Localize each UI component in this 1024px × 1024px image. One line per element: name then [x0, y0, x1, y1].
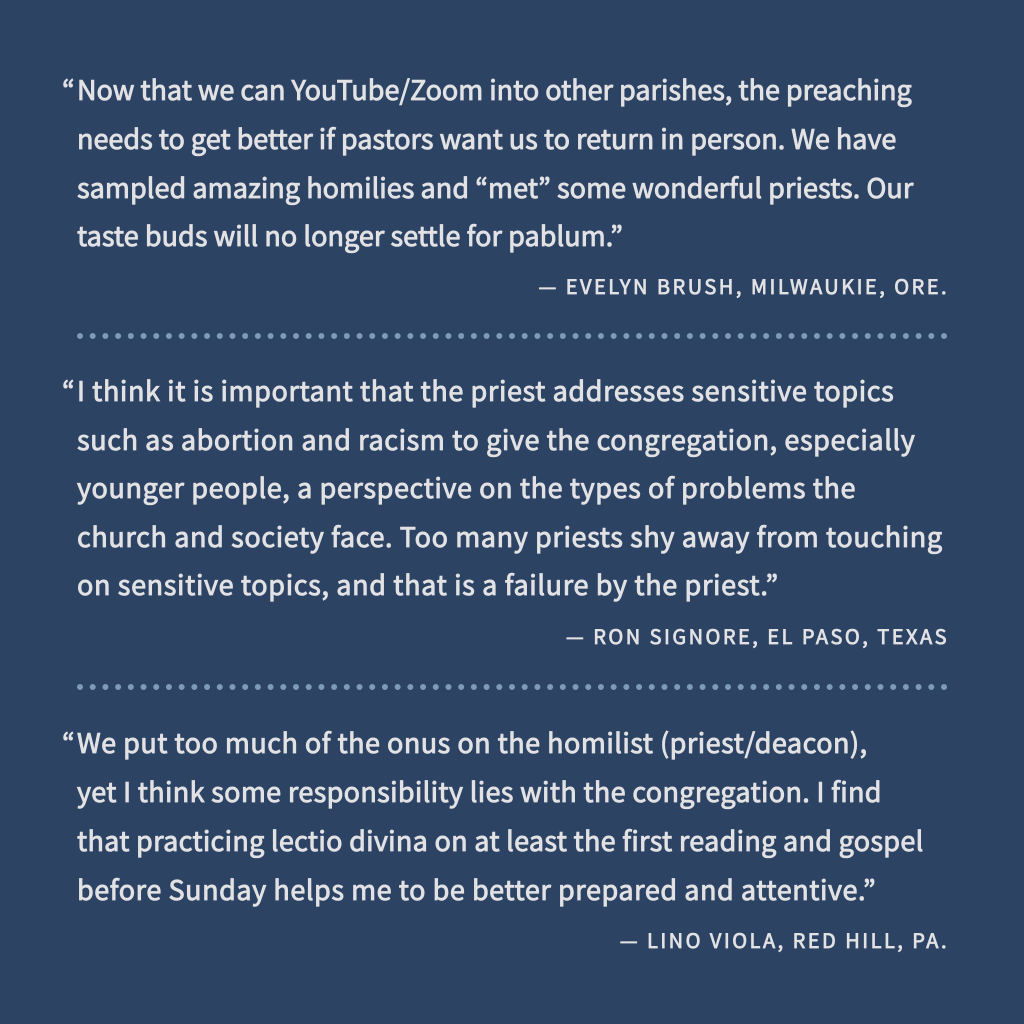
quote: Evelyn Brush: sampled amazing homilies and “met” some wonderful priests. Our [77, 167, 913, 206]
quote: Lino Viola: We put too much of the onus on the homilist (priest/deacon), [77, 722, 868, 761]
quote: Ron Signore: I think it is important that the priest addresses sensitive topics [77, 370, 894, 409]
quote: Lino Viola: “ [62, 722, 75, 761]
quote: Evelyn Brush: “ [62, 69, 75, 108]
quote: Lino Viola: yet I think some responsibility lies with the congregation. I find [77, 771, 882, 810]
quote: Evelyn Brush: — EVELYN BRUSH, MILWAUKIE, ORE. [538, 271, 949, 300]
quote: Evelyn Brush: Now that we can YouTube/Zoom into other parishes, the preaching [77, 69, 912, 108]
quote: Lino Viola: — LINO VIOLA, RED HILL, PA. [620, 925, 949, 954]
quote: Ron Signore: — RON SIGNORE, EL PASO, TEXAS [566, 621, 949, 650]
quote: Lino Viola: that practicing lectio divina on at least the first reading and gospel [77, 820, 924, 859]
quote: Evelyn Brush: needs to get better if pastors want us to return in person. We have [77, 118, 896, 157]
quote: Ron Signore: “ [62, 370, 75, 409]
quote: Ron Signore [62, 370, 949, 650]
quote: Lino Viola: before Sunday helps me to be better prepared and attentive.” [77, 869, 876, 908]
quote: Evelyn Brush [62, 69, 949, 300]
quote: Ron Signore: church and society face. Too many priests shy away from touching [77, 516, 943, 555]
quote: Ron Signore: younger people, a perspective on the types of problems the [77, 467, 856, 506]
quote: Evelyn Brush: taste buds will no longer settle for pablum.” [77, 215, 623, 254]
quote: Ron Signore: on sensitive topics, and that is a failure by the priest.” [77, 564, 779, 603]
quote: Ron Signore: such as abortion and racism to give the congregation, especially [77, 419, 915, 458]
